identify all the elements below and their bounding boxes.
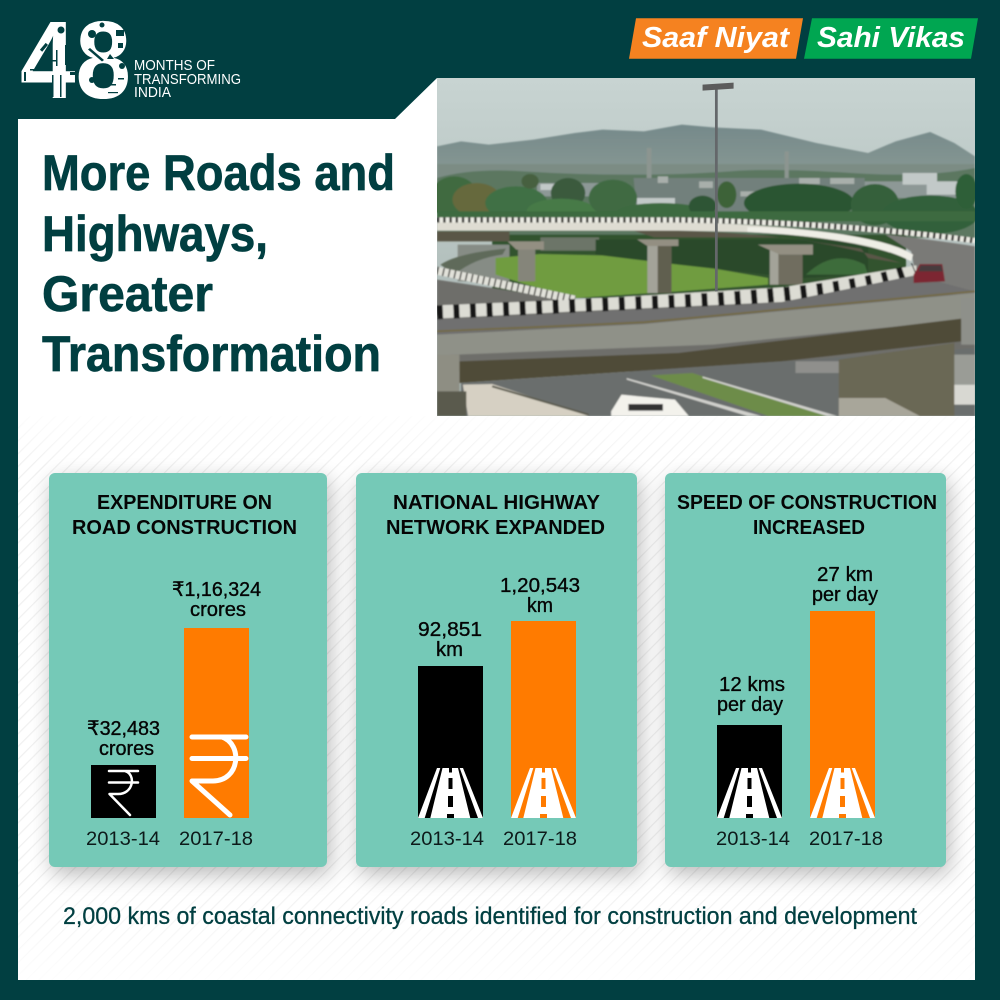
- value 2013-14: crores: [99, 738, 154, 760]
- heading: INCREASED: [753, 517, 865, 539]
- pillars: [647, 241, 672, 293]
- heading: NETWORK EXPANDED: [386, 517, 605, 539]
- title: Transformation: [42, 326, 381, 382]
- heading: NATIONAL HIGHWAY: [393, 492, 601, 514]
- roads: [437, 280, 975, 371]
- bar 2017-18: [511, 621, 576, 818]
- panel: expenditure on road construction: [49, 473, 327, 867]
- year labels: [716, 829, 883, 850]
- bar 2013-14: [91, 765, 156, 818]
- logo caption: INDIA: [134, 84, 171, 101]
- value 2017-18: [812, 564, 878, 606]
- title: Greater: [42, 266, 213, 322]
- badge: Sahi Vikas: [804, 18, 978, 59]
- bar 2017-18: [184, 628, 249, 818]
- icon: road: [511, 768, 576, 818]
- heading: EXPENDITURE ON: [97, 492, 272, 514]
- bar 2013-14: [418, 666, 483, 818]
- value 2013-14: 92,851: [418, 619, 482, 641]
- year labels: 2017-18: [809, 829, 883, 850]
- left barrier: [437, 271, 575, 300]
- icon: road: [717, 768, 782, 818]
- year labels: [86, 829, 253, 850]
- logo icon cut-outs: [24, 22, 125, 97]
- lamp post: [715, 88, 718, 291]
- buildings: [634, 178, 865, 215]
- panel: speed of construction increased: [665, 473, 946, 867]
- upper deck soffit: [437, 231, 901, 263]
- logo: 48 months of transforming India: [20, 0, 241, 122]
- icon: large rupee: [192, 737, 246, 815]
- badge: Saaf Niyat: Saaf Niyat: [642, 22, 790, 54]
- value 2013-14: [418, 619, 482, 661]
- year labels: 2013-14: [410, 829, 484, 850]
- year labels: [410, 829, 577, 850]
- upper deck face: [437, 222, 913, 261]
- year labels: 2017-18: [179, 829, 253, 850]
- title: [42, 145, 395, 382]
- icon: road: [810, 768, 875, 818]
- heading: [72, 492, 297, 539]
- value 2017-18: ₹1,16,324: [172, 579, 261, 601]
- year labels: 2013-14: [716, 829, 790, 850]
- value 2013-14: 12 kms: [719, 674, 785, 696]
- value 2013-14: [717, 674, 785, 716]
- heading: SPEED OF CONSTRUCTION: [677, 492, 937, 514]
- year labels: 2017-18: [503, 829, 577, 850]
- badge: Saaf Niyat: [629, 18, 803, 59]
- icon: road: [418, 768, 483, 818]
- value 2017-18: 27 km: [817, 564, 873, 586]
- heading: ROAD CONSTRUCTION: [72, 517, 297, 539]
- title: More Roads and: [42, 145, 395, 201]
- inner barrier: [437, 265, 916, 319]
- value 2017-18: [172, 579, 261, 621]
- icon: small rupee: [109, 771, 138, 815]
- value 2017-18: per day: [812, 584, 878, 606]
- lower road deck: [437, 275, 975, 335]
- logo caption: [134, 57, 241, 101]
- footer note: 2,000 kms of coastal connectivity roads identified for construction and development: [63, 903, 917, 930]
- value 2017-18: [500, 575, 580, 617]
- value 2013-14: ₹32,483: [87, 718, 160, 740]
- heading: [677, 492, 937, 539]
- tree line: [430, 176, 478, 220]
- ground below: [461, 348, 975, 416]
- card shadows: [52, 480, 949, 874]
- value 2013-14: [87, 718, 160, 760]
- car: [914, 264, 945, 283]
- heading: [386, 492, 605, 539]
- bar 2017-18: [810, 611, 875, 818]
- badge: Sahi Vikas: Sahi Vikas: [817, 22, 965, 54]
- panel: national highway network expanded: [356, 473, 637, 867]
- title: Highways,: [42, 206, 268, 262]
- value 2013-14: km: [436, 639, 463, 661]
- van: [611, 395, 689, 416]
- logo caption: MONTHS OF: [134, 57, 215, 74]
- value 2017-18: 1,20,543: [500, 575, 580, 597]
- value 2017-18: crores: [190, 599, 246, 621]
- under deck: [492, 235, 906, 298]
- value 2017-18: km: [527, 595, 553, 617]
- logo caption: TRANSFORMING: [134, 71, 241, 88]
- bar 2013-14: [717, 725, 782, 818]
- year labels: 2013-14: [86, 829, 160, 850]
- value 2013-14: per day: [717, 694, 783, 716]
- logo numerals: 48: [20, 0, 131, 122]
- photo: curved flyover: [437, 78, 975, 416]
